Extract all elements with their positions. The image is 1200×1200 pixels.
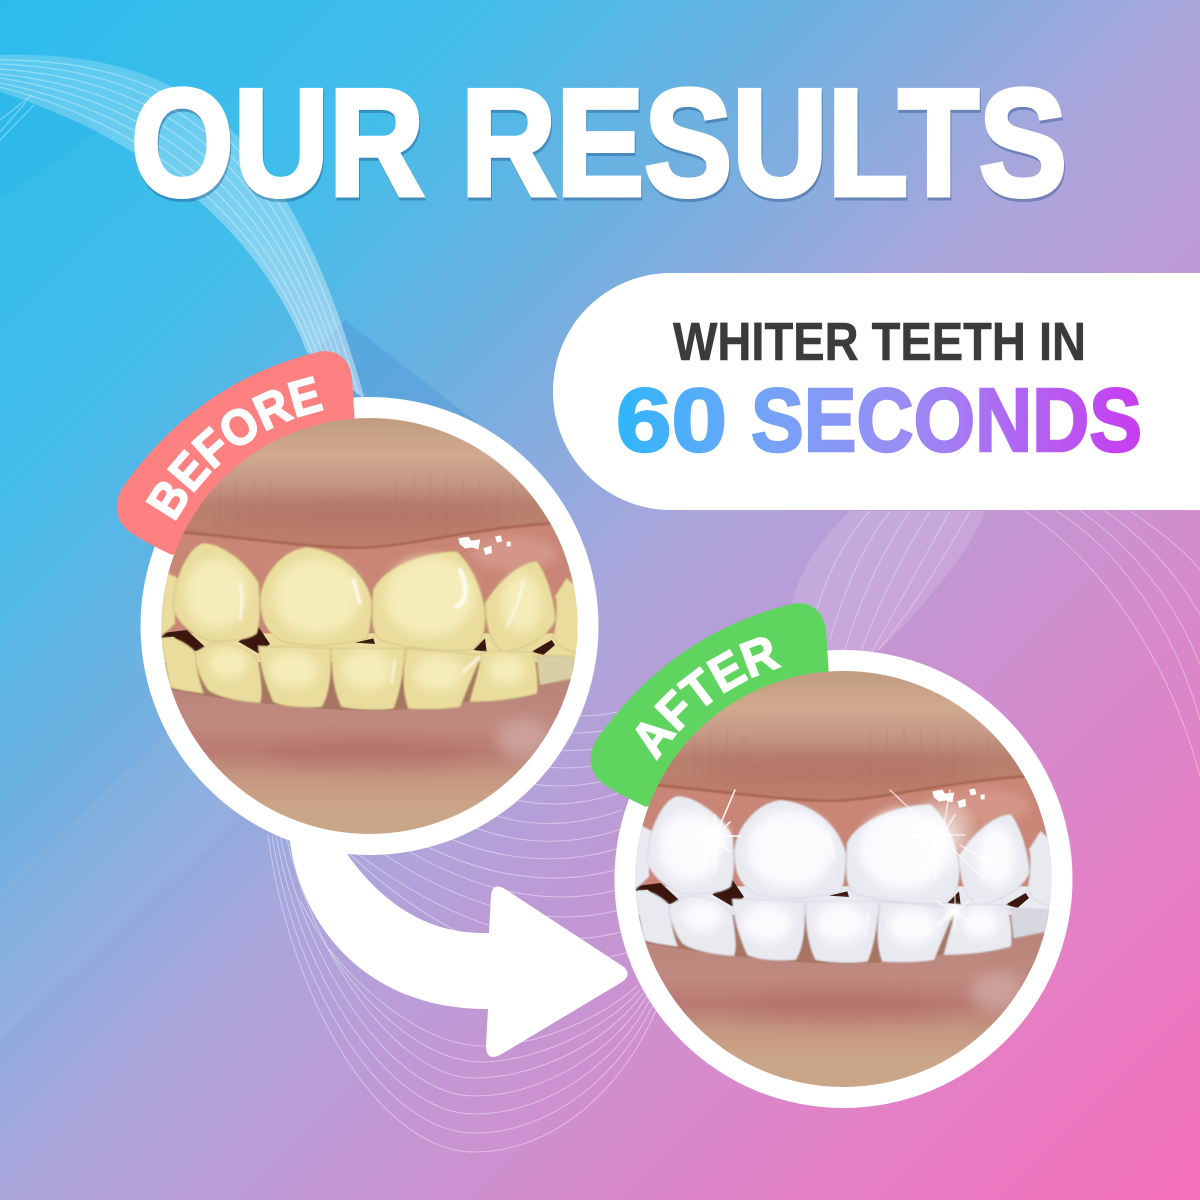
decorative lines: lower wave [268, 712, 660, 1152]
badge label: after: AFTER [635, 637, 782, 761]
decorative ribbon: top left [0, 55, 365, 400]
badge label: before: BEFORE [146, 376, 324, 521]
white ring [614, 650, 1072, 1108]
photo: yellow teeth [162, 418, 578, 834]
panel: before photo [116, 351, 598, 855]
badge shape: before [117, 351, 355, 555]
panel: after photo [590, 603, 1072, 1108]
sparkles [692, 790, 1000, 930]
highlighted duration [616, 371, 1142, 471]
background facets [0, 60, 480, 1040]
pill background [553, 273, 1200, 510]
badge shape: after [591, 603, 829, 807]
title: OUR RESULTS [131, 58, 1067, 228]
highlighted duration: 60 [616, 371, 727, 471]
highlighted duration: SECONDS [751, 371, 1142, 471]
subheading: WHITER TEETH IN [673, 312, 1086, 372]
decorative ribbon: centre right [792, 511, 986, 660]
decorative lines: right [1025, 511, 1200, 777]
photo: white teeth [636, 671, 1052, 1087]
white ring [140, 397, 598, 855]
arrow: before to after [289, 835, 628, 1057]
panel: headline pill [553, 273, 1200, 510]
